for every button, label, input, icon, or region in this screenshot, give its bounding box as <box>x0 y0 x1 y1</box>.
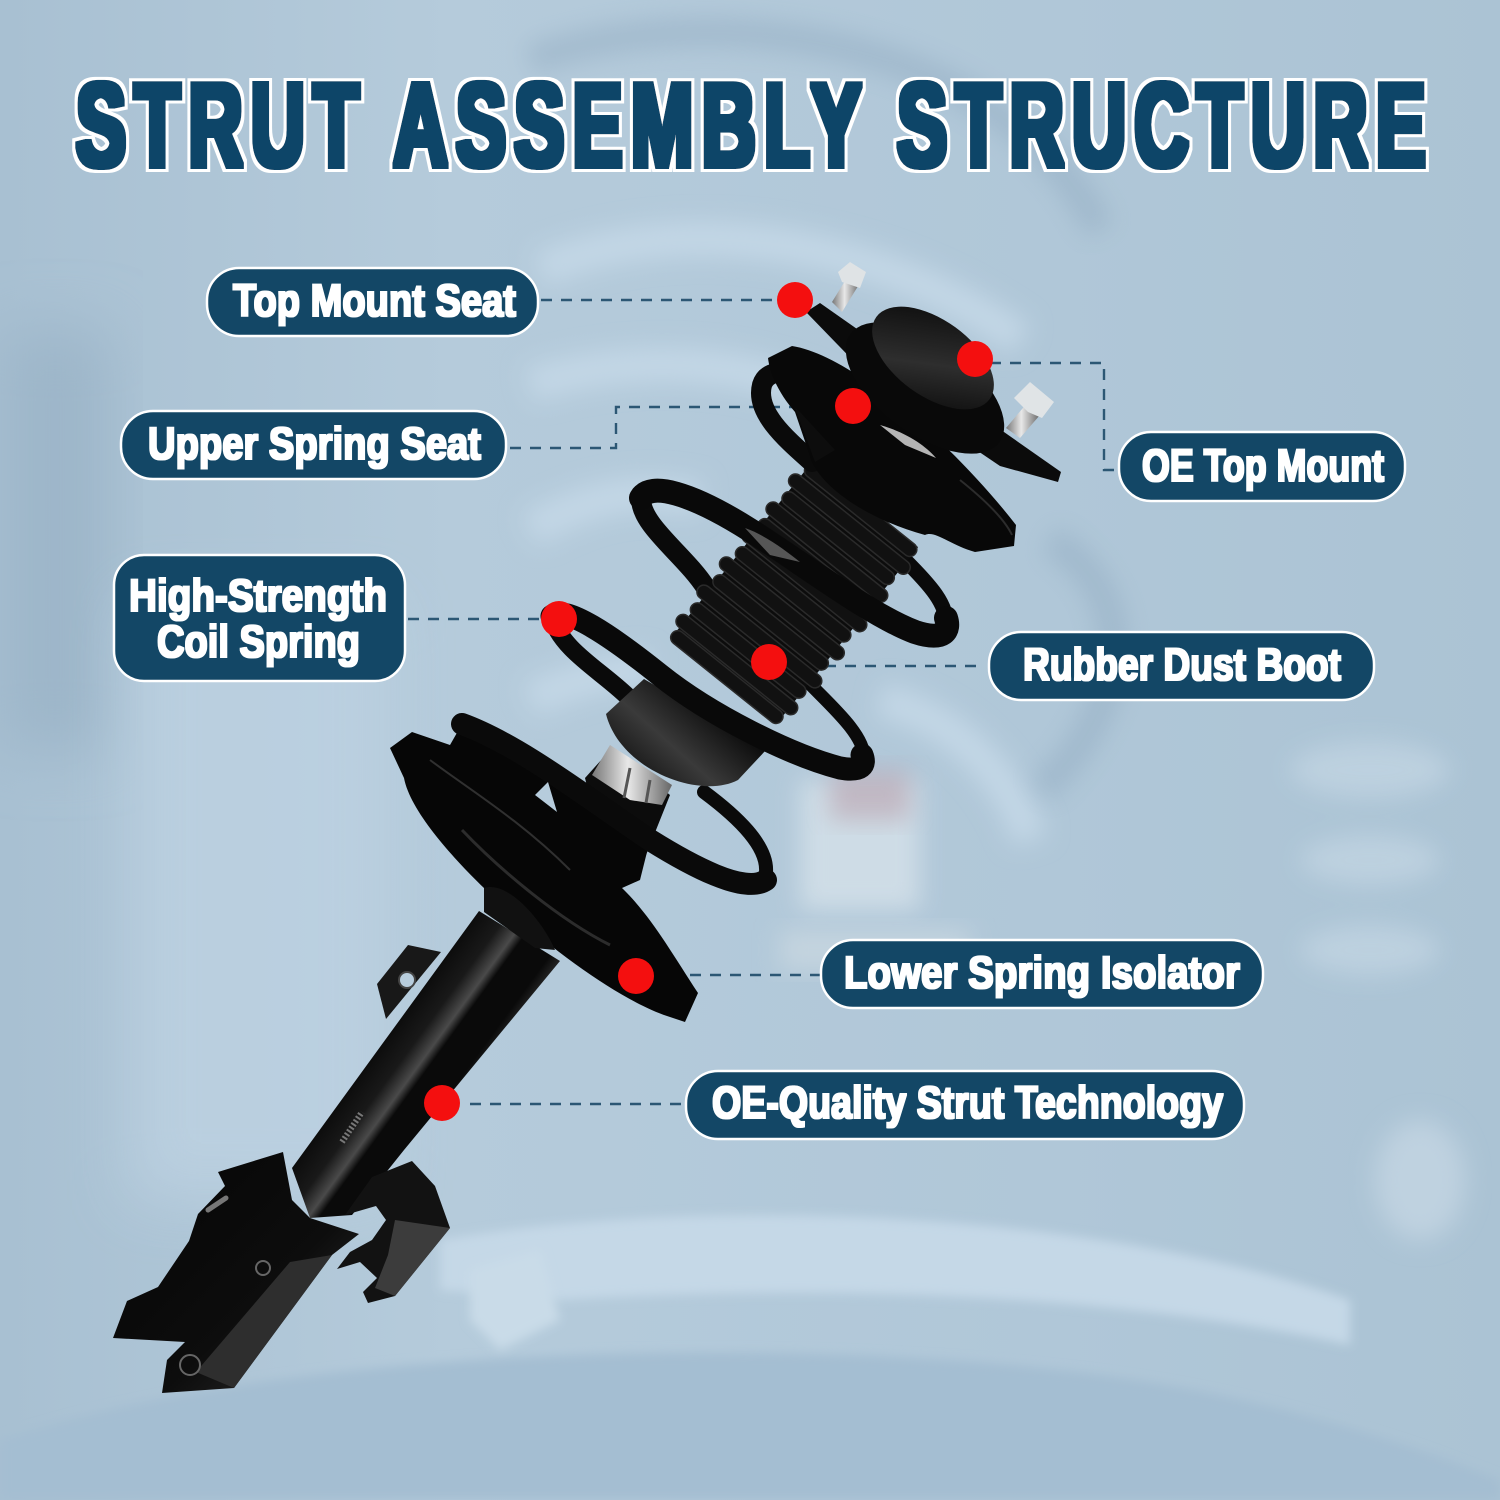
icon: upper spring seat <box>768 346 1016 552</box>
icon: top mount plate <box>806 303 1061 482</box>
icon: upper coil top <box>761 372 850 462</box>
label: OE-Quality Strut Technology <box>686 1071 1244 1139</box>
icon: rubber dust boot <box>662 456 926 731</box>
strut assembly illustration <box>113 262 1061 1393</box>
label: Lower Spring Isolator: Lower Spring Isolator <box>844 947 1240 998</box>
icon: coil spring rear strands <box>552 498 946 872</box>
icon: mounting tab <box>377 945 441 1019</box>
connector lines <box>408 300 1118 1104</box>
label: High-Strength Coil Spring: High-Strength <box>129 570 387 621</box>
icon: shock tube <box>292 911 560 1218</box>
label: Top Mount Seat: Top Mount Seat <box>233 275 516 326</box>
icon: top mount bolts <box>832 262 1054 438</box>
icon: lower spring isolator <box>390 724 698 1022</box>
label: Rubber Dust Boot <box>989 632 1374 700</box>
callout markers: red dots <box>424 282 993 1121</box>
icon: steel nut <box>592 745 672 805</box>
icon: piston shaft <box>585 748 670 870</box>
icon: bump stop bushing <box>606 679 766 786</box>
label: Upper Spring Seat <box>121 411 506 479</box>
icon: top mount dome <box>824 286 1026 479</box>
label: High-Strength Coil Spring <box>114 555 405 681</box>
icon: coil spring front strands <box>552 491 947 769</box>
label: Rubber Dust Boot: Rubber Dust Boot <box>1023 639 1341 690</box>
label: High-Strength Coil Spring: Coil Spring <box>157 616 360 667</box>
icon: side bracket <box>337 1161 450 1303</box>
label: OE Top Mount <box>1119 432 1405 501</box>
icon: lower coil strand <box>462 724 766 884</box>
label: OE Top Mount: OE Top Mount <box>1142 440 1384 491</box>
label: Upper Spring Seat: Upper Spring Seat <box>148 418 481 469</box>
label: OE-Quality Strut Technology: OE-Quality Strut Technology <box>712 1077 1223 1128</box>
label: Top Mount Seat <box>207 268 538 336</box>
icon: knuckle bracket <box>113 1152 359 1393</box>
label: Lower Spring Isolator <box>821 940 1263 1008</box>
